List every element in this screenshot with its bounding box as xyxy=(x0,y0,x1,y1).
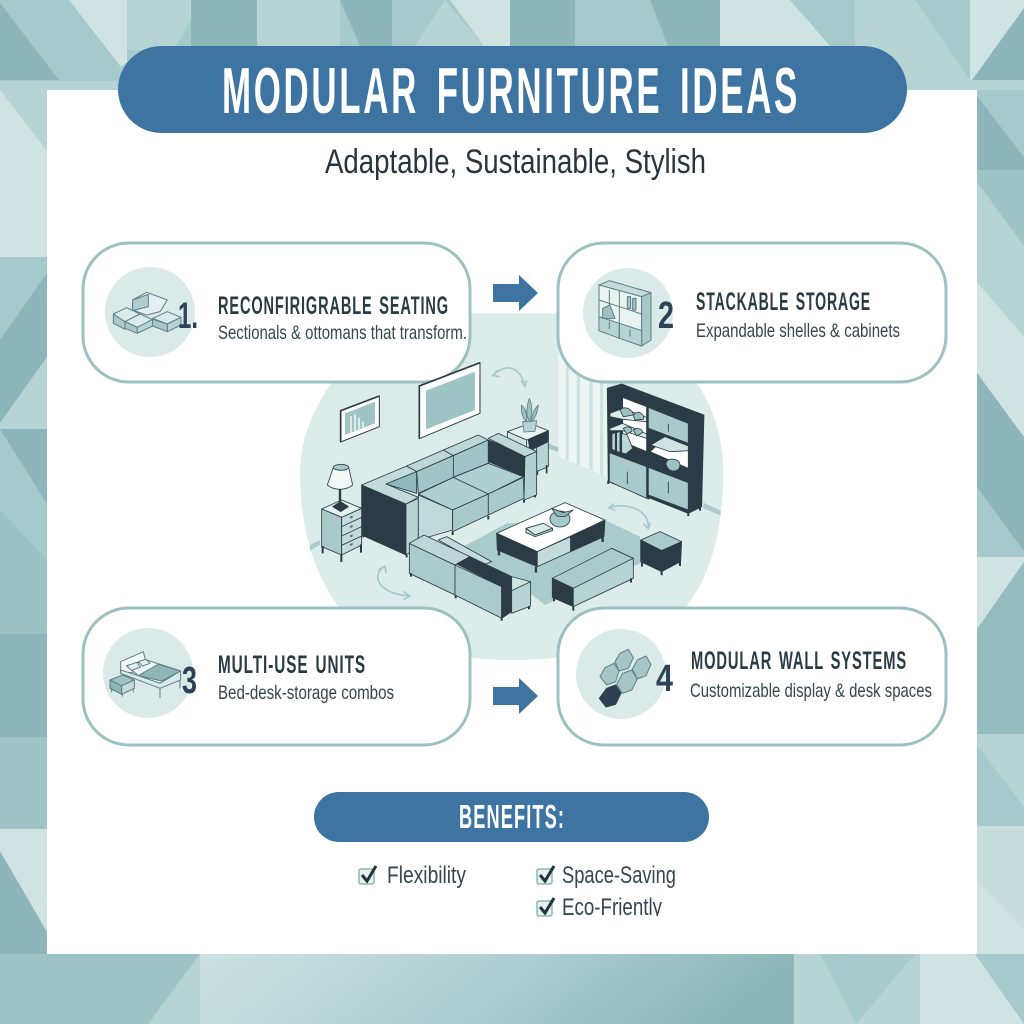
benefit: eco-friendly: Eco-Friently xyxy=(562,894,662,921)
curtain xyxy=(558,340,607,477)
card 3 description: Bed-desk-storage combos xyxy=(218,682,394,704)
card 2: stackable storage xyxy=(558,243,946,382)
subtitle: Adaptable, Sustainable, Stylish xyxy=(325,143,706,181)
baseboards xyxy=(310,443,721,551)
left strip xyxy=(0,90,47,257)
bottom strip xyxy=(0,954,200,1024)
card 1 heading: RECONFIRIGRABLE SEATING xyxy=(218,292,449,320)
benefit: flexibility: Flexibility xyxy=(387,862,466,889)
card 3: multi-use units xyxy=(83,608,470,745)
title banner xyxy=(118,46,907,133)
benefit: flexibility xyxy=(359,862,466,889)
central pale backdrop xyxy=(300,313,723,660)
coffee table xyxy=(497,503,605,573)
card 4 description: Customizable display & desk spaces xyxy=(690,680,932,702)
curved arrow: left xyxy=(378,566,410,599)
small wall picture xyxy=(341,396,379,442)
large wall picture xyxy=(419,363,480,439)
white content panel xyxy=(47,90,977,954)
bench xyxy=(552,548,633,611)
main sectional sofa xyxy=(362,433,537,557)
benefits banner xyxy=(314,792,709,842)
front sofa xyxy=(409,535,531,621)
benefit: space-saving: Space-Saving xyxy=(562,862,676,889)
icon: hexagon wall tiles xyxy=(599,649,651,707)
number 4: 4 xyxy=(656,658,673,700)
curved arrow: top xyxy=(493,368,527,387)
icon: sectional sofa xyxy=(113,292,181,333)
rug xyxy=(463,520,640,605)
icon: bed with side table xyxy=(110,652,181,698)
card 4: modular wall systems xyxy=(558,608,946,745)
benefit: space-saving xyxy=(537,862,676,889)
arrow: card 3 to card 4 xyxy=(493,678,538,714)
number 3: 3 xyxy=(182,660,197,702)
lamp side table xyxy=(322,464,362,562)
ottoman xyxy=(641,532,682,575)
card 2 description: Expandable shelles & cabinets xyxy=(696,320,900,342)
plant side table xyxy=(507,398,548,475)
icon: shelving unit xyxy=(599,281,651,346)
right strip xyxy=(977,90,1024,170)
card 3 heading: MULTI-USE UNITS xyxy=(218,651,366,679)
curved arrow: right xyxy=(609,504,650,529)
number 2: 2 xyxy=(658,295,674,337)
number 1: 1. xyxy=(178,295,198,336)
benefit: eco-friendly xyxy=(537,894,668,926)
card 2 heading: STACKABLE STORAGE xyxy=(696,288,871,316)
central room illustration xyxy=(310,363,721,621)
benefits banner: BENEFITS: xyxy=(459,798,565,835)
card 1 description: Sectionals & ottomans that transform. xyxy=(218,322,467,344)
arrow: card 1 to card 2 xyxy=(493,275,538,311)
storage wall unit xyxy=(607,384,704,516)
card 1: reconfigurable seating xyxy=(83,243,470,382)
